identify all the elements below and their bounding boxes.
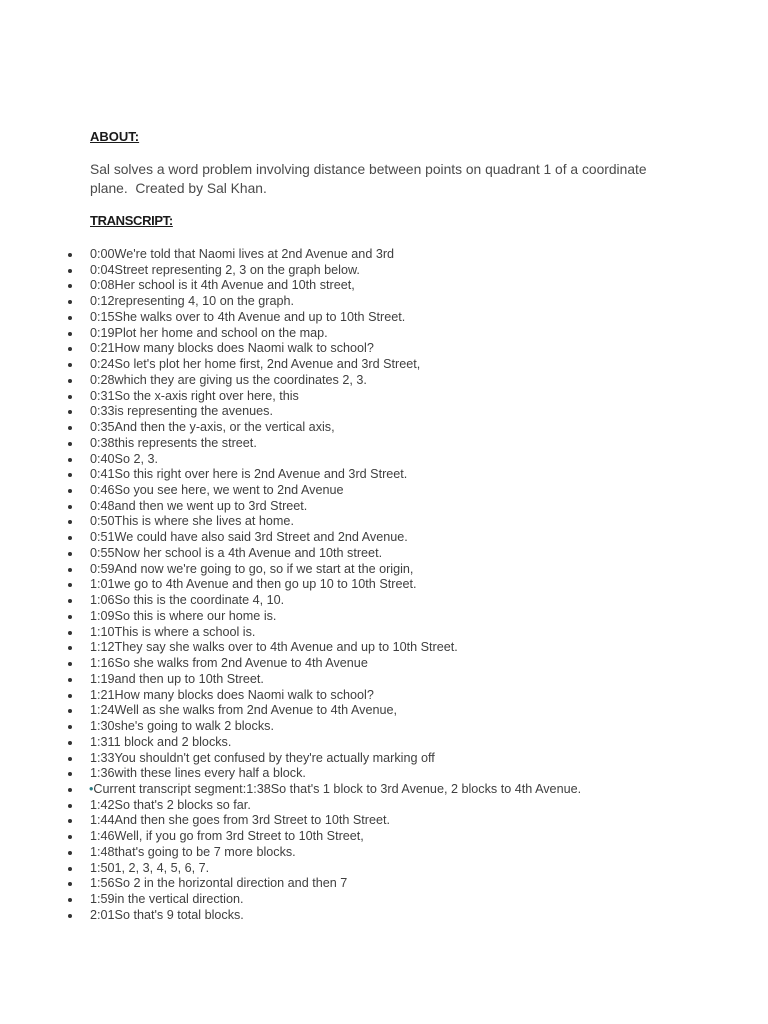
bulleted transcript list: 0:33is representing the avenues. bbox=[90, 404, 273, 418]
bulleted transcript list: 1:30she's going to walk 2 blocks. bbox=[90, 719, 274, 733]
bulleted transcript list: 1:56So 2 in the horizontal direction and then 7 bbox=[90, 876, 347, 890]
bulleted transcript list: 0:55Now her school is a 4th Avenue and 10th street. bbox=[90, 546, 382, 560]
bulleted transcript list: 1:01we go to 4th Avenue and then go up 10 to 10th Street. bbox=[90, 577, 416, 591]
text block: about description: Sal solves a word problem involving distance between points on quadrant 1 of a coordinate bbox=[90, 161, 647, 177]
bulleted transcript list: 1:33You shouldn't get confused by they're actually marking off bbox=[90, 750, 435, 764]
bulleted transcript list: 0:38this represents the street. bbox=[90, 436, 257, 450]
text block: about description: plane. Created by Sal Khan. bbox=[90, 180, 267, 196]
bulleted transcript list: 1:21How many blocks does Naomi walk to school? bbox=[90, 688, 374, 702]
bulleted transcript list: 0:40So 2, 3. bbox=[90, 452, 158, 466]
bulleted transcript list: 0:31So the x-axis right over here, this bbox=[90, 389, 299, 403]
bulleted transcript list: 0:46So you see here, we went to 2nd Avenue bbox=[90, 483, 344, 497]
bulleted transcript list: 0:21How many blocks does Naomi walk to school? bbox=[90, 341, 374, 355]
bulleted transcript list: 1:42So that's 2 blocks so far. bbox=[90, 798, 251, 812]
bulleted transcript list: 1:06So this is the coordinate 4, 10. bbox=[90, 593, 284, 607]
bulleted transcript list: 0:41So this right over here is 2nd Avenue and 3rd Street. bbox=[90, 467, 407, 481]
bulleted transcript list: •Current transcript segment:1:38So that's 1 block to 3rd Avenue, 2 blocks to 4th Avenue. bbox=[89, 782, 581, 796]
bulleted transcript list: 1:311 block and 2 blocks. bbox=[90, 735, 231, 749]
bulleted transcript list: 1:24Well as she walks from 2nd Avenue to 4th Avenue, bbox=[90, 703, 397, 717]
heading: about: ABOUT: bbox=[90, 129, 139, 144]
bulleted transcript list: 0:19Plot her home and school on the map. bbox=[90, 326, 328, 340]
bulleted transcript list: 0:12representing 4, 10 on the graph. bbox=[90, 294, 294, 308]
bulleted transcript list: 0:15She walks over to 4th Avenue and up to 10th Street. bbox=[90, 310, 405, 324]
bulleted transcript list: 1:10This is where a school is. bbox=[90, 625, 255, 639]
bulleted transcript list: 1:12They say she walks over to 4th Avenue and up to 10th Street. bbox=[90, 640, 458, 654]
bulleted transcript list: 0:04Street representing 2, 3 on the graph below. bbox=[90, 263, 360, 277]
bulleted transcript list: 0:51We could have also said 3rd Street and 2nd Avenue. bbox=[90, 530, 408, 544]
bulleted transcript list: 0:48and then we went up to 3rd Street. bbox=[90, 499, 307, 513]
bulleted transcript list: 1:48that's going to be 7 more blocks. bbox=[90, 845, 296, 859]
bulleted transcript list: 0:08Her school is it 4th Avenue and 10th street, bbox=[90, 278, 355, 292]
bulleted transcript list: 1:44And then she goes from 3rd Street to 10th Street. bbox=[90, 813, 390, 827]
bulleted transcript list: 0:28which they are giving us the coordinates 2, 3. bbox=[90, 373, 367, 387]
bulleted transcript list: 0:00We're told that Naomi lives at 2nd Avenue and 3rd bbox=[90, 247, 394, 261]
bulleted transcript list: 0:24So let's plot her home first, 2nd Avenue and 3rd Street, bbox=[90, 357, 420, 371]
bulleted transcript list: 0:35And then the y-axis, or the vertical axis, bbox=[90, 420, 335, 434]
bulleted transcript list: 2:01So that's 9 total blocks. bbox=[90, 908, 244, 922]
bulleted transcript list: 1:16So she walks from 2nd Avenue to 4th Avenue bbox=[90, 656, 368, 670]
heading: transcript: TRANSCRIPT: bbox=[90, 213, 173, 228]
bulleted transcript list: 1:19and then up to 10th Street. bbox=[90, 672, 264, 686]
text block: about description bbox=[90, 161, 647, 196]
bulleted transcript list: 0:50This is where she lives at home. bbox=[90, 514, 294, 528]
bulleted transcript list: 1:59in the vertical direction. bbox=[90, 892, 244, 906]
bulleted transcript list bbox=[68, 247, 581, 922]
bulleted transcript list: 1:36with these lines every half a block. bbox=[90, 766, 306, 780]
bulleted transcript list: 0:59And now we're going to go, so if we start at the origin, bbox=[90, 562, 413, 576]
bulleted transcript list: 1:501, 2, 3, 4, 5, 6, 7. bbox=[90, 861, 209, 875]
bulleted transcript list: 1:46Well, if you go from 3rd Street to 10th Street, bbox=[90, 829, 364, 843]
bulleted transcript list: 1:09So this is where our home is. bbox=[90, 609, 276, 623]
